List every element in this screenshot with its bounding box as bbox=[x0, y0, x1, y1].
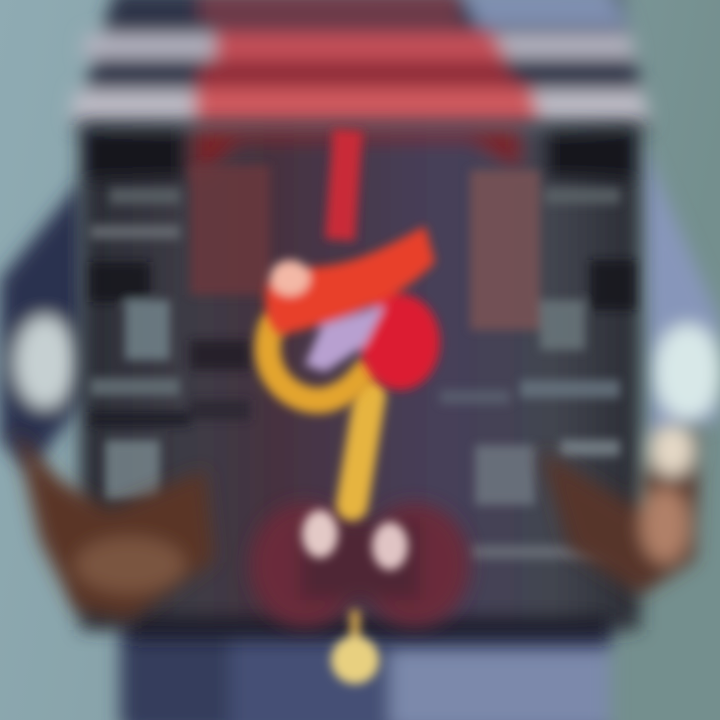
board rows bbox=[90, 165, 635, 559]
organ: stomach bbox=[265, 226, 440, 390]
shirt bottom bbox=[120, 610, 610, 720]
right arm bbox=[640, 140, 720, 440]
left arm bbox=[0, 180, 85, 470]
organ: yellow tube bbox=[331, 395, 379, 684]
organ: kidneys and bladder bbox=[250, 503, 470, 627]
organ: esophagus bbox=[340, 130, 348, 240]
organ: yellow loop bbox=[268, 325, 365, 400]
shirt top stripes bbox=[70, 0, 650, 130]
organ: kidney highlights bbox=[302, 510, 408, 570]
chart board bbox=[80, 125, 640, 639]
hands bbox=[15, 424, 700, 620]
